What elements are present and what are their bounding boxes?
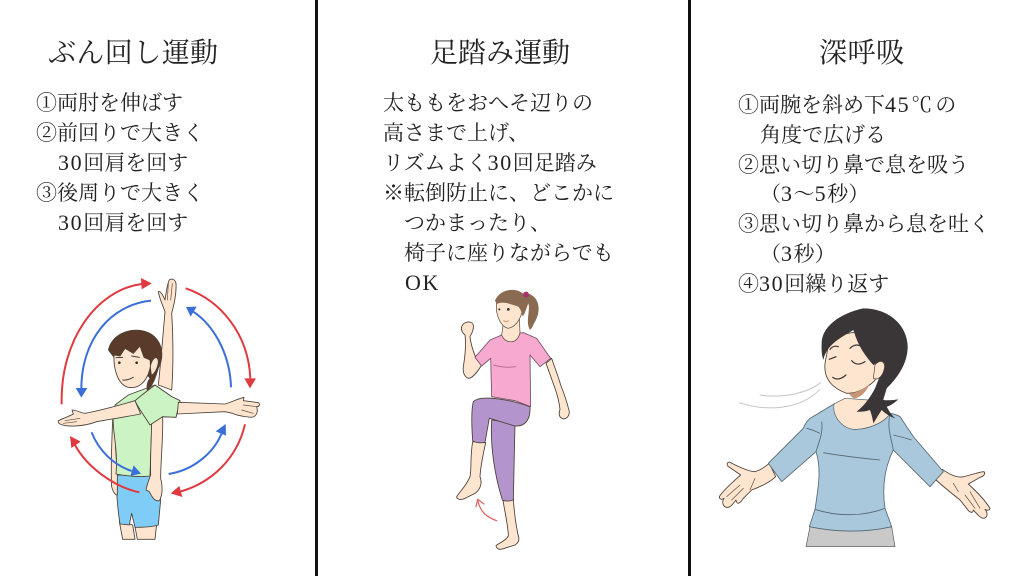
text block: stepping instructions: ※転倒防止に、どこかに bbox=[383, 181, 614, 205]
heading: 深呼吸: 深呼吸 bbox=[819, 37, 904, 69]
text block: arm swing steps: ②前回りで大きく bbox=[36, 121, 204, 145]
panel: 足踏み運動 bbox=[383, 37, 614, 549]
illustration: woman breathing with open arms bbox=[719, 308, 990, 547]
heading: 足踏み運動: 足踏み運動 bbox=[430, 37, 570, 69]
text block: arm swing steps bbox=[36, 91, 204, 235]
text block: stepping instructions: OK bbox=[405, 270, 440, 295]
illustration: person swinging arms with arrows bbox=[58, 278, 260, 539]
text block: arm swing steps: ①両肘を伸ばす bbox=[36, 91, 183, 115]
panel: 深呼吸 bbox=[719, 37, 990, 547]
text block: deep breathing steps bbox=[738, 92, 990, 296]
text block: deep breathing steps: ②思い切り鼻で息を吸う bbox=[738, 153, 969, 177]
text block: stepping instructions: リズムよく30回足踏み bbox=[383, 150, 597, 175]
text block: stepping instructions: 太ももをおへそ辺りの bbox=[383, 91, 593, 115]
text block: deep breathing steps: 角度で広げる bbox=[760, 123, 886, 147]
text block: stepping instructions: つかまったり、 bbox=[404, 211, 551, 235]
text block: stepping instructions: 高さまで上げ、 bbox=[383, 121, 529, 145]
text block: deep breathing steps: ①両腕を斜め下45℃の bbox=[738, 92, 956, 117]
text block: arm swing steps: 30回肩を回す bbox=[58, 210, 188, 235]
text block: arm swing steps: ③後周りで大きく bbox=[36, 181, 204, 205]
text block: stepping instructions bbox=[383, 91, 614, 295]
illustration: woman marching in place bbox=[457, 290, 569, 549]
heading: ぶん回し運動: ぶん回し運動 bbox=[48, 37, 218, 69]
text block: deep breathing steps: ④30回繰り返す bbox=[738, 271, 889, 296]
text block: stepping instructions: 椅子に座りながらでも bbox=[404, 241, 614, 265]
text block: deep breathing steps: （3～5秒） bbox=[760, 181, 869, 206]
panel: ぶん回し運動 bbox=[36, 37, 260, 539]
text block: deep breathing steps: ③思い切り鼻から息を吐く bbox=[738, 212, 990, 236]
text block: deep breathing steps: （3秒） bbox=[760, 241, 836, 266]
text block: arm swing steps: 30回肩を回す bbox=[58, 150, 188, 175]
